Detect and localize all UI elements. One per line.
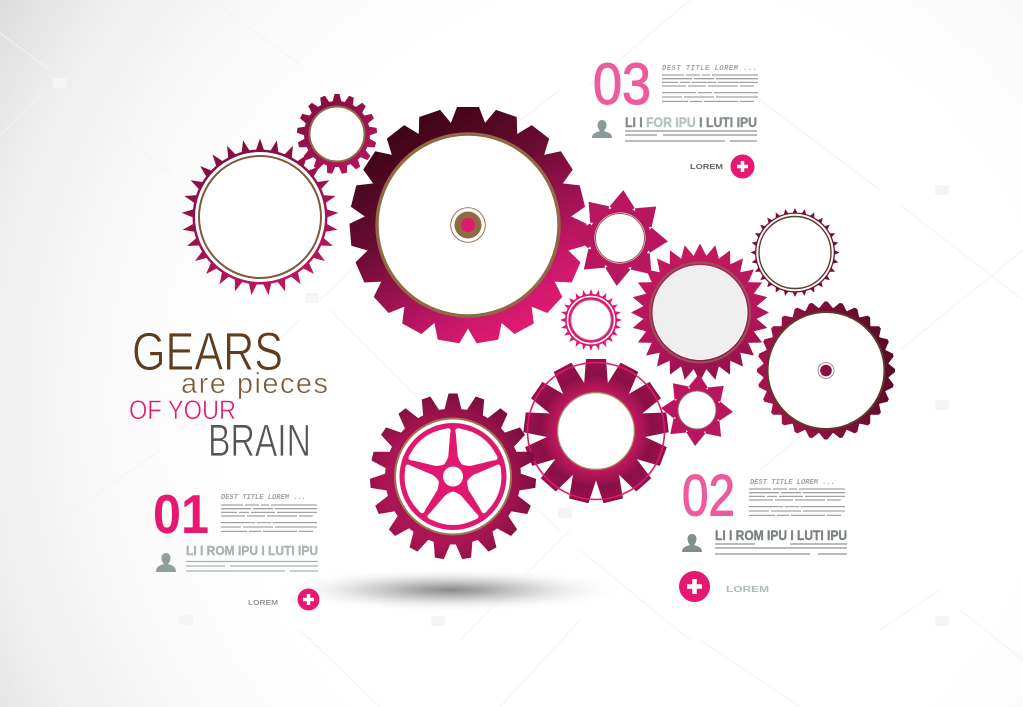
text block 02 [679,464,847,602]
gear: right gear with small hub [757,302,895,440]
title [129,322,328,466]
plus button [679,571,710,602]
lines [625,131,757,141]
hub [451,208,485,242]
title: BRAIN [208,415,311,466]
header line: DEST TITLE LOREM ... [221,494,306,502]
gear: ring gear with wedge teeth [523,359,669,504]
number 02: 02 [682,464,735,528]
lines [186,562,318,571]
person icon [592,120,612,138]
header line: DEST TITLE LOREM ... [750,479,835,487]
gear: small upper gear [296,94,378,174]
gear: large central gear [350,107,586,344]
number 01: 01 [153,483,209,545]
bar heading: LI I FOR IPU I LUTI IPU [625,115,757,130]
header line: DEST TITLE LOREM ... [662,65,757,73]
paragraph lines [221,505,317,531]
more link: LOREM [690,164,723,171]
title: OF YOUR [129,395,236,425]
title: are pieces [181,368,328,400]
plus button [298,588,320,610]
number 03: 03 [593,52,651,117]
paragraph lines [749,489,845,515]
title: GEARS [132,322,283,382]
gear: upper left thin gear [182,138,338,295]
gear: small lower star gear [659,372,735,448]
lines [715,544,847,554]
hub [818,362,834,378]
gear: star gear [569,187,671,289]
text block 01 [153,483,320,610]
gear: upper right thin gear [727,201,849,315]
gear: middle gear with grey disk [631,244,769,380]
paragraph lines [662,75,758,101]
bar heading: LI I ROM IPU I LUTI IPU [186,543,318,558]
person icon [156,553,176,572]
gear: spoked wheel gear [370,394,536,560]
gear: small spiky gear [552,284,630,356]
spoked wheel [399,422,507,530]
text block 03 [592,52,758,178]
more link: LOREM [248,600,278,607]
bar heading: LI I ROM IPU I LUTI IPU [715,528,847,543]
person icon [682,534,702,552]
plus button [730,154,754,178]
ground shadow [272,568,628,612]
more link: LOREM [726,585,769,594]
